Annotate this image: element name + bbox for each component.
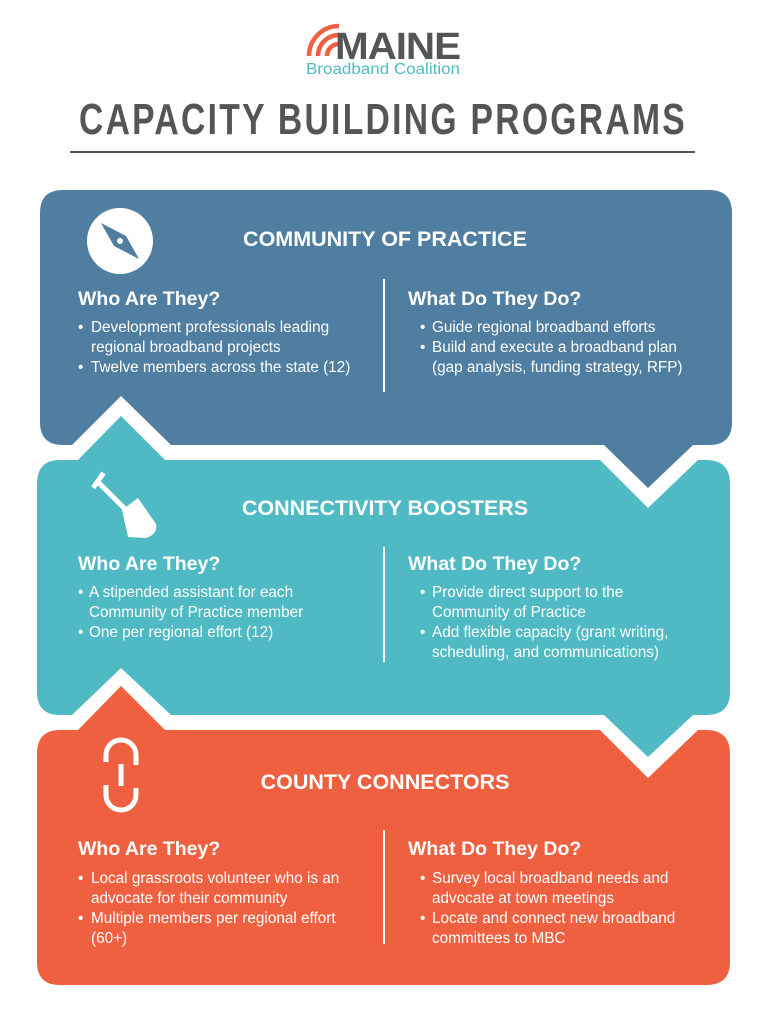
logo bbox=[306, 26, 460, 78]
text block: what: • bbox=[420, 319, 425, 336]
panel: county connectors bbox=[37, 686, 730, 985]
text block: who: • bbox=[78, 624, 83, 641]
text block: who bbox=[78, 553, 303, 641]
text block: who: • bbox=[78, 584, 83, 601]
text block: who: Local grassroots volunteer who is an bbox=[91, 870, 339, 887]
text block: who: Development professionals leading bbox=[91, 319, 329, 336]
text block: who: Who Are They? bbox=[78, 553, 220, 575]
text block: what: advocate at town meetings bbox=[432, 890, 614, 907]
text block: what bbox=[408, 553, 668, 661]
text block: what: What Do They Do? bbox=[408, 838, 581, 860]
logo: Broadband Coalition bbox=[306, 61, 460, 78]
text block: what: Community of Practice bbox=[432, 604, 586, 621]
icon: shovel bbox=[91, 471, 156, 538]
heading: CONNECTIVITY BOOSTERS bbox=[242, 496, 528, 520]
icon: wifi arcs bbox=[309, 26, 339, 56]
logo: MAINE bbox=[335, 26, 460, 68]
text block: what: What Do They Do? bbox=[408, 553, 581, 575]
icon: compass bbox=[87, 208, 153, 274]
text block: what: (gap analysis, funding strategy, RFP) bbox=[432, 359, 683, 376]
text block: who: regional broadband projects bbox=[91, 339, 281, 356]
text block: what: scheduling, and communications) bbox=[432, 644, 659, 661]
text block: who: A stipended assistant for each bbox=[89, 584, 293, 601]
text block: what: Provide direct support to the bbox=[432, 584, 623, 601]
heading: COMMUNITY OF PRACTICE bbox=[243, 227, 527, 251]
text block: what: • bbox=[420, 624, 425, 641]
text block: who: • bbox=[78, 910, 83, 927]
text block: who: Who Are They? bbox=[78, 288, 220, 310]
text block: what bbox=[408, 288, 683, 376]
text block: what: • bbox=[420, 870, 425, 887]
text block: what: What Do They Do? bbox=[408, 288, 581, 310]
text block: who bbox=[78, 838, 339, 947]
text block: what: committees to MBC bbox=[432, 930, 565, 947]
text block: who: Community of Practice member bbox=[89, 604, 303, 621]
text block: who: (60+) bbox=[91, 930, 127, 947]
text block: who bbox=[78, 288, 350, 376]
text block: what: Guide regional broadband efforts bbox=[432, 319, 656, 336]
text block: what bbox=[408, 838, 675, 947]
text block: who: Twelve members across the state (12) bbox=[91, 359, 350, 376]
text block: who: advocate for their community bbox=[91, 890, 288, 907]
text block: what: • bbox=[420, 339, 425, 356]
text block: what: • bbox=[420, 910, 425, 927]
heading: COUNTY CONNECTORS bbox=[261, 770, 509, 794]
text block: who: Multiple members per regional effort bbox=[91, 910, 336, 927]
icon: chain link bbox=[106, 740, 136, 810]
text block: what: Add flexible capacity (grant writing, bbox=[432, 624, 668, 641]
panel: connectivity boosters bbox=[37, 416, 730, 757]
text block: who: Who Are They? bbox=[78, 838, 220, 860]
text block: who: • bbox=[78, 870, 83, 887]
text block: who: • bbox=[78, 359, 83, 376]
text block: who: • bbox=[78, 319, 83, 336]
text block: what: Survey local broadband needs and bbox=[432, 870, 668, 887]
text block: what: Locate and connect new broadband bbox=[432, 910, 675, 927]
text block: what: Build and execute a broadband plan bbox=[432, 339, 677, 356]
text block: who: One per regional effort (12) bbox=[89, 624, 273, 641]
text block: what: • bbox=[420, 584, 425, 601]
panel: community of practice bbox=[40, 190, 732, 488]
